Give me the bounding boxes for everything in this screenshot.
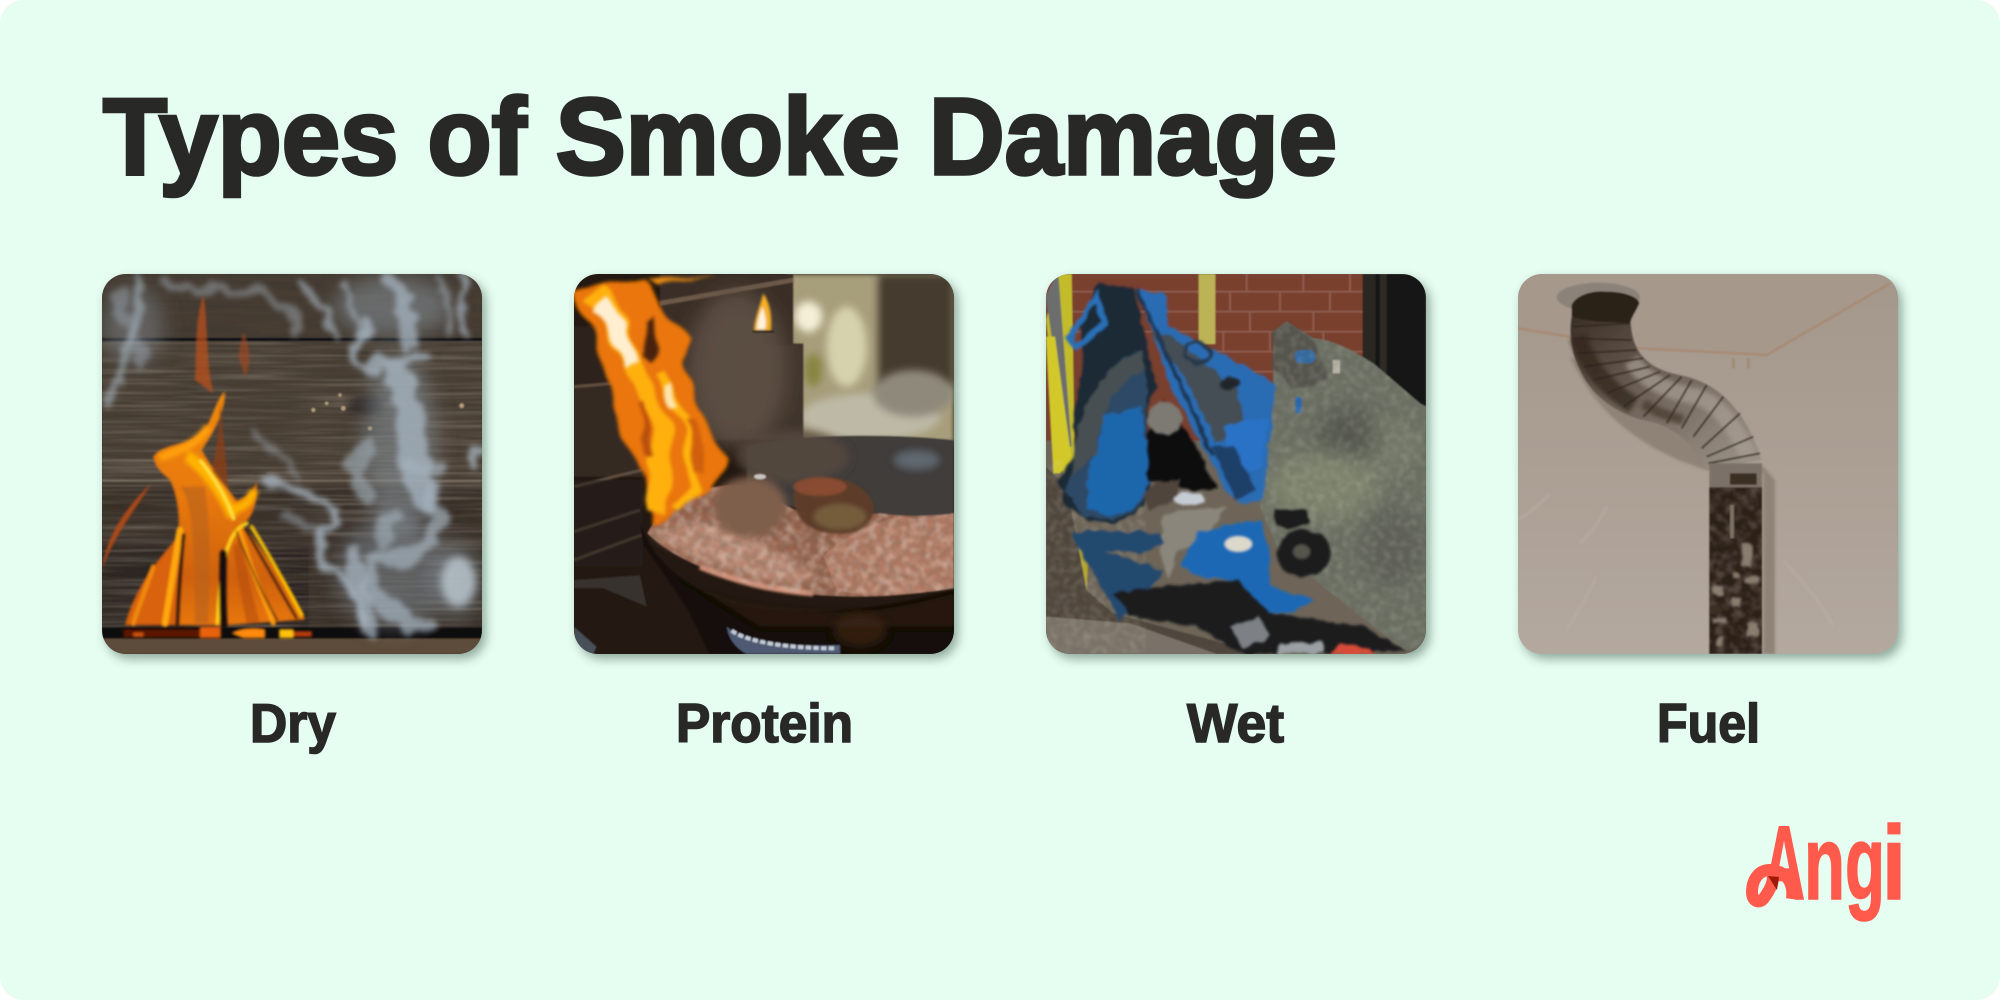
pan body [638,513,954,654]
straight sooty pipe [1709,463,1762,488]
logo: Angi [1752,805,1906,922]
wheel [1277,530,1331,577]
small flame [754,293,771,331]
base [102,627,482,639]
smoke wisps [110,277,477,628]
photo: sooty flue pipe [1518,274,1898,654]
flame [102,295,305,625]
label: Wet: Wet [1187,692,1284,754]
image shadow: fuel [1522,279,1902,659]
embers [123,627,312,638]
label: Protein: Protein [676,692,853,754]
pan interior [747,436,954,527]
label: Fuel: Fuel [1657,692,1760,754]
dark stacks [660,274,803,440]
title: Types of Smoke Damage [103,76,1337,198]
panel: protein smoke damage [574,274,958,659]
yellow posts and grey pipe [1199,274,1215,344]
logo: Angi: n [1804,805,1845,922]
photo: burned blue bin [1046,274,1426,654]
ceiling [1518,274,1893,334]
bin lower fragments [1070,530,1163,620]
logo: Angi: A [1763,805,1805,922]
ground [1046,467,1263,654]
image shadow: protein [578,279,958,659]
panel: fuel smoke damage [1518,274,1902,659]
flange [1557,283,1640,312]
big flame [577,275,727,524]
photo: flame and smoke on wood [102,274,482,654]
rug mass [1260,322,1426,651]
bin group [1058,283,1407,654]
bin back left [1058,283,1157,523]
flexible duct [1570,317,1762,468]
image shadow: dry [106,279,486,659]
meat [647,485,954,597]
soft smoke mass [103,277,480,630]
bin lid [1137,290,1275,503]
label: Dry: Dry [250,692,336,754]
steak puck [793,478,874,534]
background right [787,274,954,444]
panel: wet smoke damage [1046,274,1430,659]
photo: flaming pan with meat [574,274,954,654]
burner [574,627,597,654]
logo: Angi: i [1882,805,1906,922]
pipe shadow [1570,357,1775,654]
logo: Angi: g [1845,805,1885,922]
brick wall [1046,274,1366,441]
interior dark [1147,400,1217,490]
panel: dry smoke damage [102,274,486,659]
image shadow: wet [1050,279,1430,659]
